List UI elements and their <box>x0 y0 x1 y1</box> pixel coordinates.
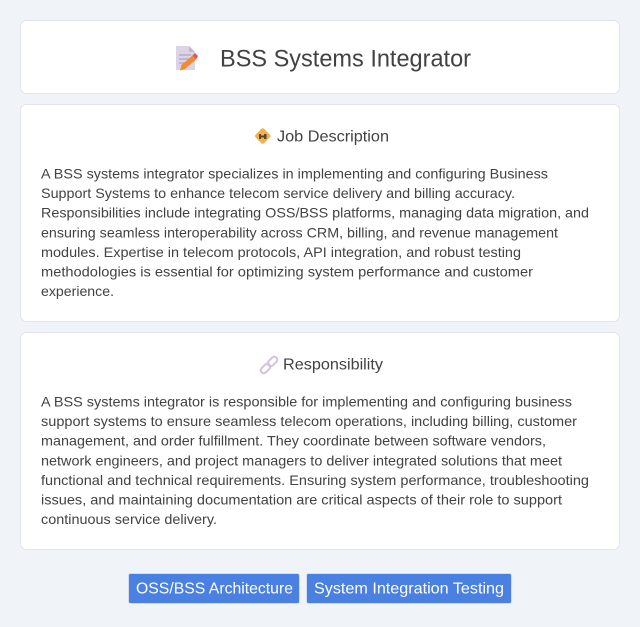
icon: memo with pencil <box>176 46 198 70</box>
body text: responsibility: support systems to ensure seamless telecom operations, including billing, customer <box>41 413 577 429</box>
heading: job description: Job Description <box>277 128 389 146</box>
panel: title <box>20 20 620 94</box>
body text: job description: modules. Expertise in telecom protocols, API integration, and robust testing <box>41 244 521 260</box>
heading: responsibility: Responsibility <box>283 356 383 374</box>
body text: responsibility: A BSS systems integrator is responsible for implementing and configuring business <box>41 394 572 410</box>
body text: job description: Support Systems to enhance telecom service delivery and billing accuracy. <box>41 185 515 201</box>
body text: job description: Responsibilities include integrating OSS/BSS platforms, managing data migration, and <box>41 205 589 221</box>
body text: responsibility: functional and technical requirements. Ensuring system performance, troubleshooting <box>41 472 589 488</box>
body text: job description <box>41 166 589 299</box>
tag: System Integration Testing <box>306 574 512 604</box>
title text: BSS Systems Integrator <box>220 46 471 72</box>
icon: puzzle diamond <box>254 128 271 144</box>
body text: responsibility: issues, and maintaining documentation are critical aspects of their role to support <box>41 492 562 508</box>
icon: link <box>259 355 279 375</box>
body text: responsibility <box>41 394 589 527</box>
body text: job description: methodologies is essential for optimizing system performance and customer <box>41 264 533 280</box>
tag: OSS/BSS Architecture <box>128 574 300 604</box>
body text: job description: ensuring seamless interoperability across CRM, billing, and revenue management <box>41 224 558 240</box>
body text: responsibility: network engineers, and project managers to deliver integrated solutions that meet <box>41 452 562 468</box>
body text: responsibility: management, and order fulfillment. They coordinate between software vendors, <box>41 433 546 449</box>
body text: job description: A BSS systems integrator specializes in implementing and configuring Business <box>41 166 548 182</box>
tag: System Integration Testing: System Integration Testing <box>314 580 504 598</box>
panel: responsibility <box>20 332 620 550</box>
tag: OSS/BSS Architecture: OSS/BSS Architecture <box>136 580 293 598</box>
panel: job description <box>20 104 620 322</box>
body text: job description: experience. <box>41 283 114 299</box>
body text: responsibility: continuous service delivery. <box>41 511 217 527</box>
